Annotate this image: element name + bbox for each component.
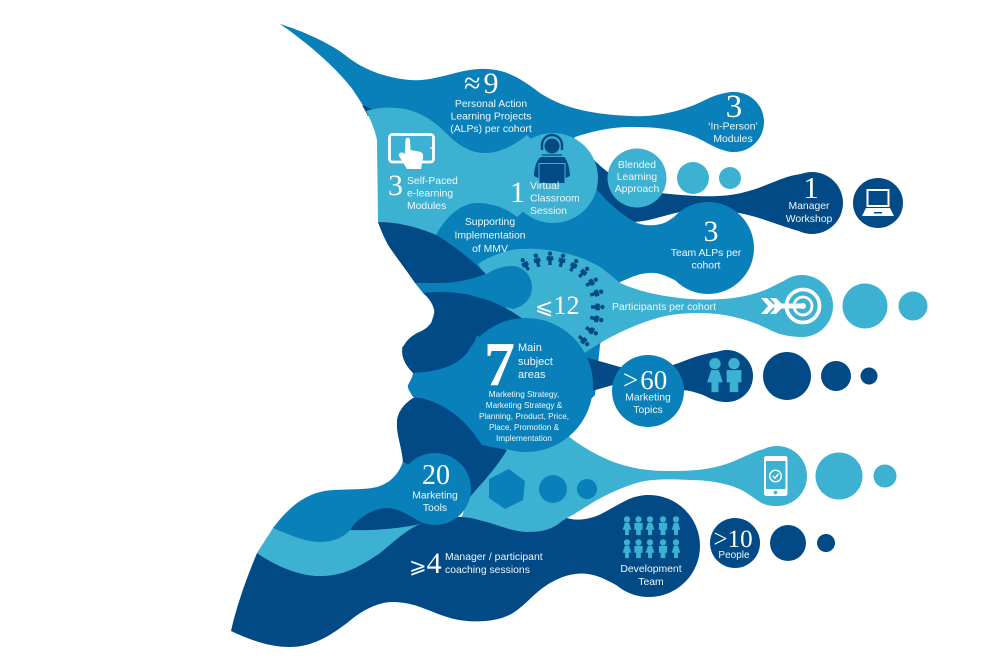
text: self-paced e-learning modules: Modules xyxy=(407,201,446,212)
text: blended learning approach: Approach xyxy=(615,184,659,195)
text: development team xyxy=(620,564,682,588)
decorative bubbles: marketing topics xyxy=(763,352,878,400)
text: virtual classroom session: Classroom xyxy=(530,194,580,204)
text: team ALPs per cohort: 3 xyxy=(704,215,718,248)
panel: coaching sessions and development team xyxy=(231,495,700,647)
icon: laptop xyxy=(853,178,903,228)
text: personal action learning projects: Personal Action xyxy=(455,99,527,110)
text: self-paced e-learning modules: Self-Paced xyxy=(407,176,458,187)
text: participants per cohort xyxy=(535,291,716,320)
panel: participants stream xyxy=(478,249,833,354)
text: manager workshop: Workshop xyxy=(786,214,833,225)
decorative bubbles: blended learning xyxy=(677,162,741,194)
nose dark shape xyxy=(402,292,523,373)
panel: blended learning circle xyxy=(608,148,666,208)
text: supporting implementation: Implementation xyxy=(454,230,526,242)
panel: central stream and team ALPs xyxy=(402,170,754,470)
text: marketing topics: Topics xyxy=(633,405,663,416)
upper forehead dark shape xyxy=(378,222,486,283)
text: supporting implementation: of MMV xyxy=(472,244,508,255)
panel: self-paced and virtual classroom xyxy=(366,108,598,235)
text: seven main subject areas: subject xyxy=(518,356,553,368)
text: seven main subject areas: Marketing Strategy, xyxy=(489,390,559,399)
text: personal action learning projects: ≈9 xyxy=(464,67,498,100)
decorative bubbles: people xyxy=(770,525,835,561)
text: seven main subject areas: Place, Promotion & xyxy=(489,423,560,432)
text: self-paced e-learning modules: 3 xyxy=(388,169,403,202)
text: in-person modules: Modules xyxy=(713,134,753,145)
text: supporting implementation: Supporting xyxy=(465,217,515,228)
text: self-paced e-learning modules: e-learning xyxy=(407,188,453,200)
text: manager workshop: Manager xyxy=(788,201,830,212)
text: coaching sessions xyxy=(409,547,543,580)
text: virtual classroom session: 1 xyxy=(510,176,525,209)
panel: marketing topics circle xyxy=(612,355,684,427)
light left stream xyxy=(257,522,430,576)
dark band: manager workshop stream xyxy=(570,150,843,234)
text: seven main subject areas: Main xyxy=(518,342,542,354)
lower left mid-blue stream xyxy=(273,462,445,545)
text: seven main subject areas: areas xyxy=(518,369,546,381)
icon: development team people xyxy=(623,516,680,558)
text: team ALPs per cohort: Team ALPs per xyxy=(671,248,742,259)
text: more than ten people: >10 xyxy=(714,526,753,553)
text: virtual classroom session: Virtual xyxy=(530,181,559,192)
text: supporting implementation xyxy=(454,217,526,255)
text: personal action learning projects xyxy=(450,67,532,135)
text: team ALPs per cohort: cohort xyxy=(692,260,721,272)
panel: marketing topics stream xyxy=(585,350,753,402)
text: blended learning approach: Learning xyxy=(617,172,657,183)
text: coaching sessions: Manager / participant xyxy=(445,552,543,563)
panel: main subject areas circle xyxy=(459,318,593,452)
text: virtual classroom session: Session xyxy=(530,206,567,217)
text: seven main subject areas: Implementation xyxy=(496,434,552,443)
icon: arc of twelve participants xyxy=(519,251,605,348)
text: personal action learning projects: Learning Projects xyxy=(451,112,531,122)
text: seven main subject areas: 7 xyxy=(484,331,515,399)
text: marketing tools: Tools xyxy=(423,503,447,514)
text: team ALPs per cohort xyxy=(671,215,742,272)
text: participants per cohort: Participants per cohort xyxy=(612,302,716,313)
mid-blue lobe xyxy=(417,266,532,309)
icon: phone with check mark xyxy=(764,456,788,496)
icon: person with headset and laptop xyxy=(534,135,570,184)
text: in-person modules: ‘In-Person’ xyxy=(708,122,758,132)
panel: personal action learning projects stream xyxy=(280,24,764,165)
decorative bubbles: target xyxy=(842,284,928,328)
icon: target with arrow xyxy=(761,290,820,322)
text: manager workshop: 1 xyxy=(803,170,819,205)
chin dark shape xyxy=(397,398,507,505)
text: blended learning approach xyxy=(615,160,659,195)
icon: tablet with pointing hand xyxy=(390,134,434,169)
text: seven main subject areas: Marketing Strategy & xyxy=(486,401,563,410)
text: marketing topics: >60 xyxy=(623,365,667,395)
icon: man and woman xyxy=(707,358,741,392)
small dark eye shape xyxy=(350,508,424,530)
decorative bubbles: phone xyxy=(816,452,896,500)
text: manager workshop xyxy=(786,170,833,225)
text: personal action learning projects: (ALPs) per cohort xyxy=(450,124,532,135)
text: seven main subject areas xyxy=(479,331,569,443)
text: marketing tools: 20 xyxy=(422,460,450,491)
text: virtual classroom session xyxy=(510,176,580,217)
text: marketing tools xyxy=(412,460,458,514)
text: in-person modules: 3 xyxy=(726,89,742,125)
text: marketing tools: Marketing xyxy=(412,490,458,502)
people count circle xyxy=(710,518,760,568)
text: seven main subject areas: Planning, Product, Price, xyxy=(479,412,569,421)
panel: phone stream xyxy=(460,436,807,535)
text: blended learning approach: Blended xyxy=(618,160,656,171)
text: marketing topics xyxy=(623,365,671,416)
text: self-paced e-learning modules xyxy=(388,169,458,212)
text: coaching sessions: ⩾4 xyxy=(409,547,442,580)
text: development team: Team xyxy=(638,577,664,588)
text: marketing topics: Marketing xyxy=(625,392,671,404)
decorative shapes: hexagon and circles xyxy=(489,469,597,509)
text: in-person modules xyxy=(708,89,758,145)
text: development team: Development xyxy=(620,564,682,575)
panel: marketing tools circle xyxy=(399,453,471,525)
text: more than ten people: People xyxy=(718,550,750,561)
text: coaching sessions: coaching sessions xyxy=(445,565,530,576)
text: participants per cohort: ⩽12 xyxy=(535,291,579,320)
